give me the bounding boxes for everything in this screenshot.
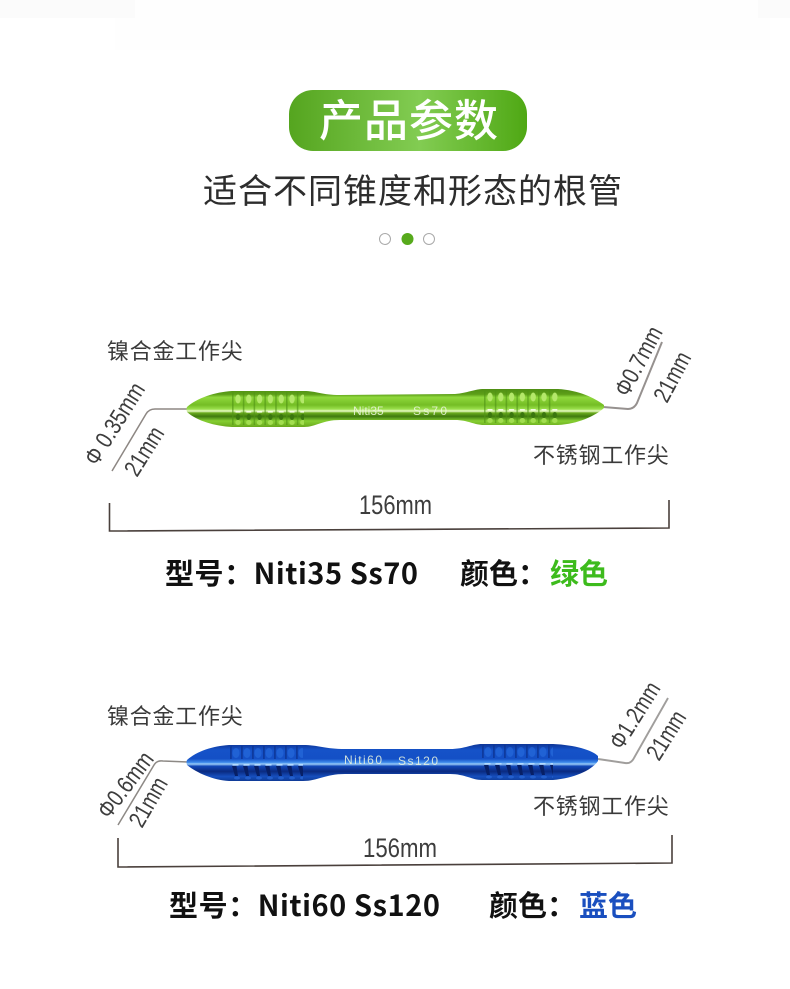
length value: 156mm [359, 490, 432, 520]
pagination dots [380, 233, 434, 245]
dimension: left length: 21mm [124, 773, 174, 832]
dimension: left diameter: Φ0.6mm [92, 747, 160, 824]
colour line: 蓝色 [579, 883, 637, 925]
faint top band [0, 0, 790, 50]
header [203, 85, 622, 245]
wire: right stainless tip [598, 698, 668, 763]
wire: left nickel titanium tip [118, 761, 188, 825]
dimension: right length: 21mm [641, 706, 692, 765]
wire: right stainless tip [603, 342, 662, 409]
grip left [232, 391, 304, 427]
length value: 156mm [363, 833, 437, 863]
length bracket [118, 835, 672, 867]
dimension: right length: 21mm [648, 347, 697, 407]
subtitle: 适合不同锥度和形态的根管 [203, 164, 622, 213]
colour line: 颜色： [489, 883, 576, 925]
label: stainless tip: 不锈钢工作尖 [533, 789, 670, 821]
etched text right: Ss120 [398, 754, 438, 768]
label: nickel titanium tip: 镍合金工作尖 [107, 699, 244, 731]
colour line [460, 551, 608, 593]
label: nickel titanium tip: 镍合金工作尖 [107, 334, 244, 366]
etched text left: Niti35 [353, 404, 384, 418]
model line: 型号：Niti35 Ss70 [165, 551, 418, 593]
green handle [186, 389, 604, 427]
dimension: left diameter: Φ 0.35mm [79, 378, 151, 470]
panel: green instrument [79, 322, 697, 593]
title pill: 产品参数 [319, 85, 499, 149]
panel: blue instrument [92, 677, 692, 925]
grip left [230, 745, 303, 781]
etched text right: Ss70 [413, 404, 447, 418]
dimension: right diameter: Φ0.7mm [609, 322, 669, 401]
wire: left nickel titanium tip [112, 409, 188, 471]
colour line [489, 883, 637, 925]
model line: 型号：Niti60 Ss120 [169, 883, 440, 925]
grip right [482, 744, 553, 780]
colour line: 颜色： [460, 551, 547, 593]
length bracket [110, 500, 669, 531]
label: stainless tip: 不锈钢工作尖 [533, 438, 670, 470]
blue handle [186, 744, 598, 781]
etched text left: Niti60 [344, 753, 382, 767]
dimension: right diameter: Φ1.2mm [604, 677, 666, 754]
colour line: 绿色 [550, 551, 608, 593]
grip right [484, 389, 559, 425]
dimension: left length: 21mm [119, 422, 170, 481]
